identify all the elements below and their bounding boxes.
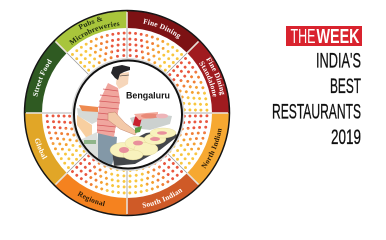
dots: South Indian bbox=[10, 0, 244, 230]
segment band: Fine Dining Standalone bbox=[169, 41, 250, 121]
segment band: Street Food bbox=[25, 41, 67, 113]
outer rim bbox=[24, 10, 230, 216]
label: Pubs and Microbreweries: Microbreweries bbox=[68, 22, 120, 45]
left counter and tray bbox=[77, 108, 100, 124]
title bbox=[272, 48, 361, 149]
segment band: Fine Dining bbox=[127, 11, 199, 53]
wheel bbox=[24, 10, 230, 216]
title: BEST bbox=[330, 74, 361, 98]
pancake toppings bbox=[119, 131, 167, 153]
segment band: Global bbox=[4, 105, 85, 185]
orange counter bbox=[77, 115, 92, 140]
griddle bbox=[112, 130, 178, 166]
logo: The Week: THE bbox=[290, 25, 316, 48]
hair bbox=[111, 65, 130, 80]
centre circle illustration bbox=[72, 58, 184, 171]
dots: North Indian bbox=[44, 30, 210, 196]
dots: Pubs and Microbreweries bbox=[44, 30, 210, 196]
shirt bbox=[97, 83, 120, 137]
arm bbox=[108, 112, 137, 135]
dots: Global bbox=[44, 30, 210, 196]
head bbox=[116, 72, 129, 89]
segment band: Pubs and Microbreweries bbox=[55, 0, 135, 71]
label: Pubs and Microbreweries: Pubs & bbox=[78, 16, 103, 30]
label: South Indian: South Indian bbox=[142, 188, 182, 208]
label: Global: Global bbox=[35, 138, 48, 160]
label: Fine Dining: Fine Dining bbox=[143, 18, 181, 39]
dots: Regional bbox=[10, 0, 244, 230]
title: 2019 bbox=[331, 125, 361, 149]
jeans bbox=[98, 133, 117, 165]
dots: Fine Dining bbox=[44, 30, 210, 196]
label: Fine Dining Standalone: Standalone bbox=[199, 61, 216, 97]
label: Fine Dining Standalone: Fine Dining bbox=[206, 56, 224, 96]
glasses bbox=[120, 75, 129, 76]
centre tray food bbox=[130, 116, 172, 130]
dots: Fine Dining Standalone bbox=[10, 0, 244, 230]
segment band: North Indian bbox=[187, 113, 229, 185]
logo: The Week bbox=[286, 25, 362, 48]
label: Regional: Regional bbox=[77, 190, 105, 206]
segment band: South Indian bbox=[119, 155, 199, 236]
city label: Bengaluru bbox=[126, 90, 170, 100]
label: North Indian: North Indian bbox=[201, 128, 222, 169]
pancakes bbox=[110, 128, 176, 160]
segment band: Regional bbox=[55, 173, 127, 215]
label: Street Food: Street Food bbox=[32, 58, 52, 96]
logo: The Week: WEEK bbox=[316, 25, 360, 48]
